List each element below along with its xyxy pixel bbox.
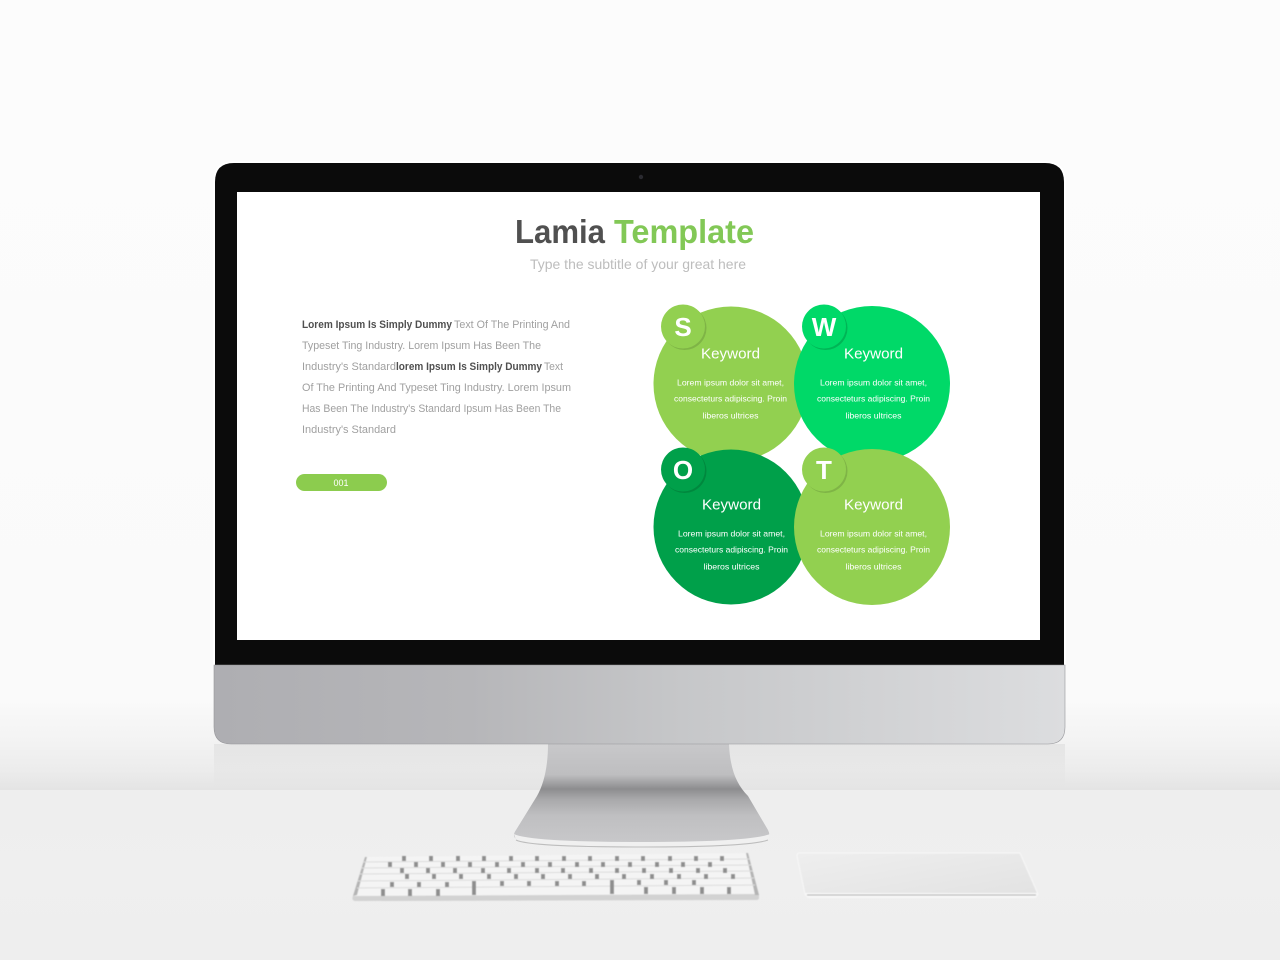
camera	[639, 175, 643, 179]
text block: Lorem Ipsum Is Simply Dummy	[302, 319, 453, 331]
text block: lorem Ipsum Is Simply Dummy	[396, 361, 543, 373]
swot panel: T: consecteturs adipiscing. Proin	[817, 544, 930, 554]
swot panel: S: Keyword	[701, 346, 760, 362]
monitor halo	[213, 161, 1066, 665]
text block: Has Been The Industry's Standard Ipsum Has Been The	[302, 403, 561, 415]
text block: Industry's Standard	[302, 361, 396, 373]
monitor bezel	[215, 163, 1064, 665]
badge: S	[661, 304, 706, 350]
title: Lamia	[515, 213, 606, 250]
badge: T: T	[816, 455, 832, 485]
text block: Text	[544, 361, 563, 373]
badge: T	[802, 448, 848, 493]
page number pill: 001	[333, 478, 349, 488]
swot panel: T	[794, 449, 950, 605]
badge: W	[802, 304, 848, 350]
monitor chin	[214, 665, 1065, 744]
text block	[302, 319, 571, 436]
text block: Text Of The Printing And	[454, 319, 570, 331]
text block: Typeset Ting Industry. Lorem Ipsum Has Been The	[302, 340, 541, 352]
swot panel: O	[654, 450, 808, 604]
screen	[237, 192, 1040, 640]
text block: Of The Printing And Typeset Ting Industry. Lorem Ipsum	[302, 382, 571, 394]
swot panel: W	[794, 306, 950, 462]
monitor stand	[514, 744, 770, 847]
swot panel: O: consecteturs adipiscing. Proin	[675, 544, 788, 554]
swot panel: T: Keyword	[844, 496, 903, 514]
monitor	[213, 161, 1066, 744]
swot panel: W: liberos ultrices	[846, 410, 902, 420]
swot panel: S: liberos ultrices	[702, 410, 758, 420]
text block: Industry's Standard	[302, 424, 396, 436]
monitor shadow on wall	[214, 744, 1065, 790]
badge: W: W	[812, 312, 837, 342]
swot panel: T: liberos ultrices	[846, 562, 902, 572]
swot panel: O: Lorem ipsum dolor sit amet,	[678, 528, 785, 538]
swot panel: W: Lorem ipsum dolor sit amet,	[820, 378, 927, 388]
badge: O: O	[673, 455, 693, 485]
badge: S: S	[674, 312, 692, 342]
badge: O	[661, 448, 706, 493]
swot panel: W: consecteturs adipiscing. Proin	[817, 394, 930, 404]
keyboard	[352, 853, 759, 901]
swot panel: S: Lorem ipsum dolor sit amet,	[677, 378, 784, 388]
swot panel: T: Lorem ipsum dolor sit amet,	[820, 528, 927, 538]
swot panel: O: liberos ultrices	[704, 562, 760, 572]
title accent: Template	[614, 213, 754, 250]
subtitle: Type the subtitle of your great here	[530, 256, 746, 272]
swot panel: S: consecteturs adipiscing. Proin	[674, 394, 787, 404]
desk surface	[0, 790, 1280, 960]
trackpad	[797, 853, 1038, 898]
swot panel: S	[654, 306, 808, 462]
page number pill	[296, 474, 387, 491]
swot panel: W: Keyword	[844, 346, 903, 362]
swot panel: O: Keyword	[702, 496, 761, 514]
